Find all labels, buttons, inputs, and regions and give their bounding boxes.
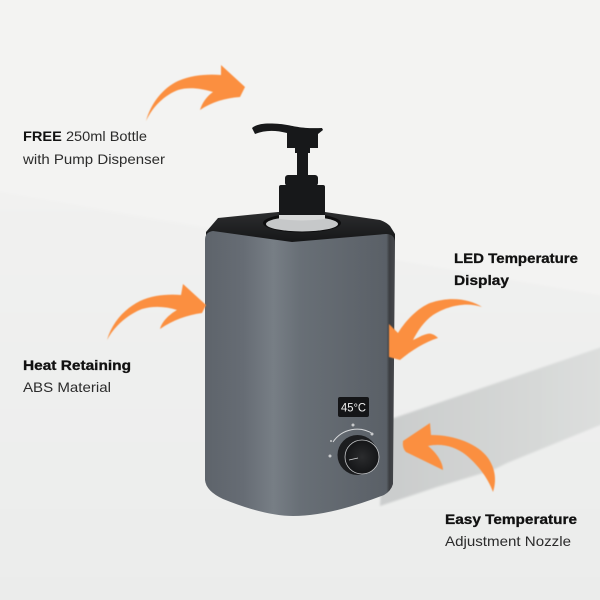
label: heat retaining ABS material: ABS Material <box>23 379 111 395</box>
label: easy temperature adjustment nozzle <box>445 511 577 549</box>
cast shadow of product <box>380 346 600 506</box>
label: FREE 250ml bottle <box>22 128 165 167</box>
bottle opening <box>263 208 341 232</box>
label: heat retaining ABS material <box>23 357 131 395</box>
LED display: 45°C <box>341 400 366 414</box>
temperature dial <box>328 424 379 475</box>
warmer body <box>205 231 395 516</box>
arrow: heat retaining <box>107 284 206 340</box>
pump dispenser <box>252 123 325 216</box>
arrow: adjustment nozzle <box>403 423 495 492</box>
warmer top lid <box>206 212 395 244</box>
label: LED temperature display: Display <box>454 272 509 288</box>
label: LED temperature display <box>454 250 578 288</box>
label: easy temperature adjustment nozzle: Adjustment Nozzle <box>445 533 571 549</box>
arrow: bottle <box>146 65 245 121</box>
arrow: LED display <box>389 299 482 360</box>
product: warmer with pump bottle <box>205 123 395 516</box>
label: LED temperature display: LED Temperature <box>454 250 578 266</box>
label: FREE 250ml bottle: with Pump Dispenser <box>22 151 165 167</box>
label: easy temperature adjustment nozzle: Easy Temperature <box>445 511 577 527</box>
label: heat retaining ABS material: Heat Retaining <box>23 357 131 373</box>
label: FREE 250ml bottle: FREE 250ml Bottle <box>23 128 147 144</box>
LED display <box>338 397 369 417</box>
